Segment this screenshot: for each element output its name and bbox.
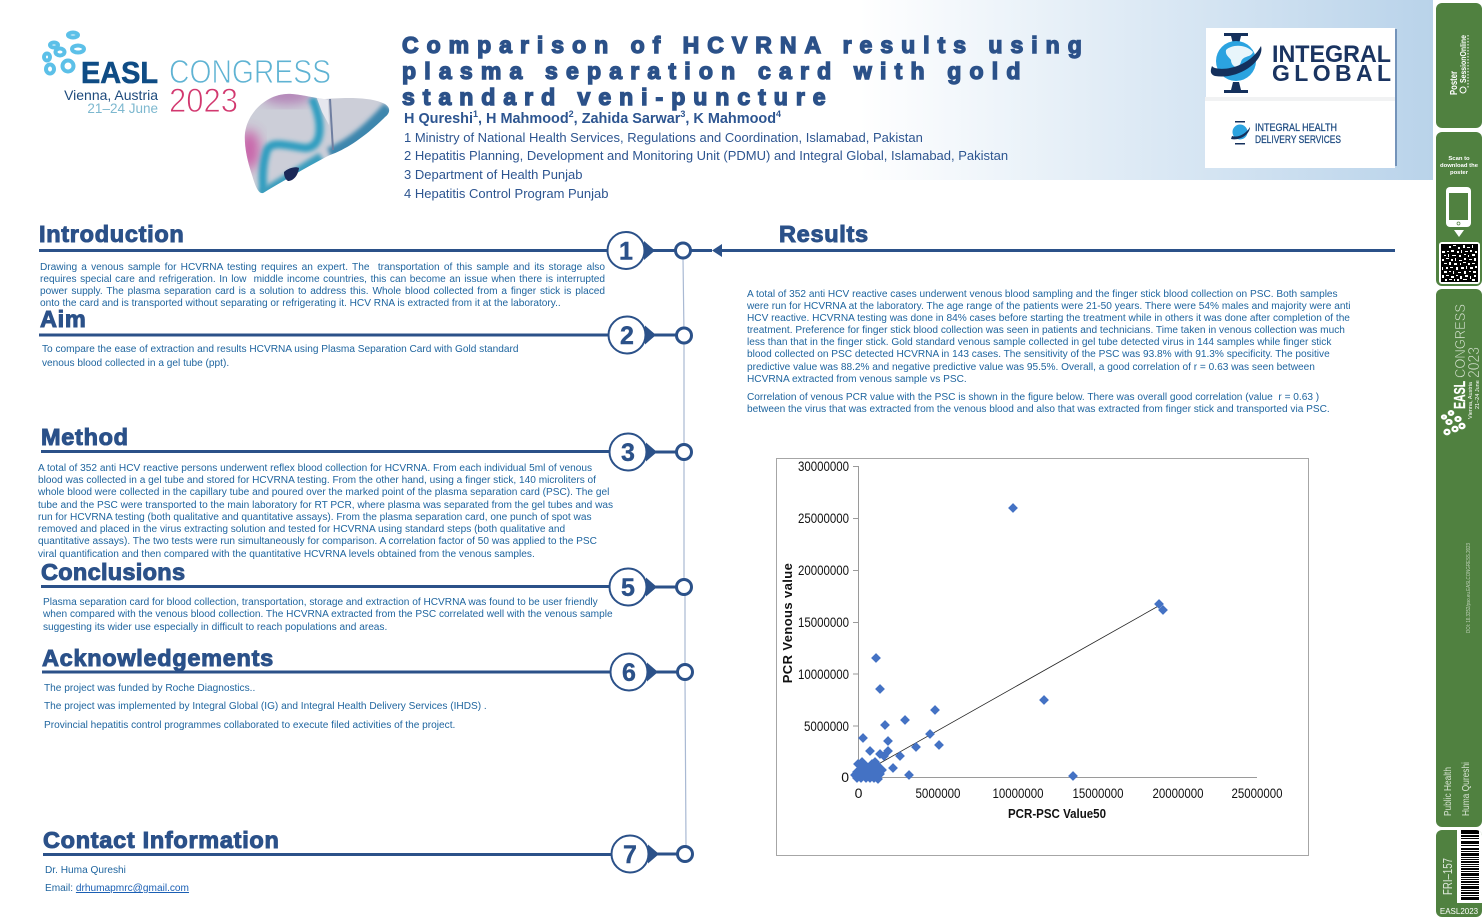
icon: poster session online mark: Poster <box>1449 71 1460 95</box>
logo panel: Integral Global and Integral Health Delivery Services: GLOBAL <box>1272 60 1391 86</box>
text: contact details: Email: drhumapmrc@gmail.com <box>45 883 189 894</box>
timeline connector: section rules, numbered circles and rings: 3 <box>621 439 635 467</box>
scatter chart: PCR venous value vs PCR-PSC value: 20000000 <box>798 562 849 578</box>
sidebar tab: poster ID and barcode <box>1436 830 1482 917</box>
text: results body: were run for HCVRNA at the laboratory. The age range of the patients were 21-50 years. There were 54% males and majority were anti <box>747 301 1351 312</box>
icon: liver illustration <box>244 94 390 194</box>
sidebar tab: poster session online <box>1436 3 1482 128</box>
text: conclusions body: when compared with the venous blood collection. The HCVRNA extracted from the PSC correlated well with the venous sample <box>43 609 613 620</box>
text: vertical congress branding: 2023 <box>1466 347 1483 378</box>
icon: poster session online mark: SessionOnline <box>1459 35 1468 83</box>
scatter chart: PCR venous value vs PCR-PSC value: 30000000 <box>798 458 849 474</box>
scatter chart: PCR venous value vs PCR-PSC value: 5000000 <box>916 785 961 801</box>
barcode <box>1457 830 1482 903</box>
text: scan to download the poster <box>1440 156 1478 176</box>
scatter chart: PCR venous value vs PCR-PSC value <box>776 458 1309 856</box>
scatter chart: PCR venous value vs PCR-PSC value: 20000000 <box>1152 785 1204 801</box>
logo panel: Integral Global and Integral Health Delivery Services: INTEGRAL <box>1272 41 1391 68</box>
logo: EASL Congress 2023: Vienna, Austria <box>64 87 158 103</box>
logo panel: Integral Global and Integral Health Delivery Services: DELIVERY SERVICES <box>1255 134 1341 146</box>
scatter chart: PCR venous value vs PCR-PSC value: 15000000 <box>1072 785 1124 801</box>
text: method body <box>38 463 613 560</box>
scatter chart: PCR venous value vs PCR-PSC value: 10000000 <box>798 666 849 682</box>
text: aim body: venous blood collected in a gel tube (ppt). <box>42 358 229 369</box>
text: poster number: FRI–157 <box>1440 858 1455 895</box>
text: vertical congress branding: Public Health <box>1442 767 1454 816</box>
text: contact details: Dr. Huma Qureshi <box>45 865 126 876</box>
text: acknowledgements body: The project was funded by Roche Diagnostics.. <box>44 683 255 694</box>
heading: Acknowledgements: Acknowledgements <box>42 645 274 671</box>
text: method body: removed and placed in the virus extracting solution and tested for HCVRNA using standard steps (both qualitative and <box>38 524 565 535</box>
text: vertical congress branding: CONGRESS <box>1452 304 1469 378</box>
logo: EASL Congress 2023: 21–24 June <box>87 101 158 116</box>
scatter chart: PCR venous value vs PCR-PSC value: 10000000 <box>992 785 1044 801</box>
sidebar tab: EASL Congress and DOI <box>1436 289 1482 827</box>
text: scan to download the poster: poster <box>1450 170 1468 176</box>
timeline connector: section rules, numbered circles and rings: 7 <box>623 841 637 869</box>
text: vertical congress branding: EASL <box>1452 381 1469 409</box>
text: method body: blood was collected in a gel tube and stored for HCVRNA testing. From the other hand, using a finger stick, 140 microliters of <box>38 475 596 486</box>
logo panel: Integral Global and Integral Health Delivery Services <box>1205 28 1396 168</box>
scatter chart: PCR venous value vs PCR-PSC value: PCR Venous value <box>780 563 795 683</box>
text: results body: less than that in the finger stick. Gold standard venous sample collected in gel tube detected virus in 144 samples while finger stick <box>747 337 1331 348</box>
text: vertical congress branding: DOI: 10.3252/pso.eu.EASLCONGRESS.2023 <box>1466 543 1472 633</box>
affiliations: 2 Hepatitis Planning, Development and Monitoring Unit (PDMU) and Integral Global, Islamabad, Pakistan <box>404 148 1008 163</box>
text: method body: run for HCVRNA testing (both qualitative and quantitative assays). From the plasma separation card, one punch of spot was <box>38 512 592 523</box>
heading: Aim: Aim <box>40 306 86 332</box>
text: acknowledgements body: The project was implemented by Integral Global (IG) and Integral Health Delivery Services (IHDS) . <box>44 701 487 712</box>
header gradient band <box>0 0 1433 180</box>
timeline connector: section rules, numbered circles and rings: 2 <box>620 322 634 350</box>
text: conclusions body: Plasma separation card for blood collection, transportation, storage and extraction of HCVRNA was found to be user friendly <box>43 597 598 608</box>
scatter chart: PCR venous value vs PCR-PSC value: 25000000 <box>798 510 849 526</box>
scatter chart: PCR venous value vs PCR-PSC value: 0 <box>841 769 849 785</box>
text: results body: predictive value was 88.2% and negative predictive value was 95.5%. Overall, a good correlation of r = 0.63 was seen between <box>747 362 1315 373</box>
title: standard veni-puncture <box>402 84 834 110</box>
text: results body: A total of 352 anti HCV reactive cases underwent venous blood sampling and the finger stick blood collection on PSC. Both samples <box>747 289 1338 300</box>
text: results body: treatment. Preference for finger stick blood collection was seen in patients and technicians. Time taken in venous collection was much <box>747 325 1345 336</box>
scatter chart: PCR venous value vs PCR-PSC value: 0 <box>855 785 863 801</box>
scatter chart: PCR venous value vs PCR-PSC value: 25000000 <box>1232 785 1283 801</box>
text: method body: quantitative assays). The two tests were run simultaneously for comparison. A correlation factor of 50 was applied to the PSC <box>38 536 597 547</box>
text: EASL2023 label: EASL2023 <box>1440 907 1478 916</box>
text: acknowledgements body <box>44 683 487 731</box>
timeline connector: section rules, numbered circles and rings: 5 <box>621 574 635 602</box>
icon: poster session online mark <box>1449 35 1468 95</box>
authors: H Qureshi1, H Mahmood2, Zahida Sarwar3, K Mahmood4 <box>404 109 781 127</box>
text: introduction body: power supply. The plasma separation card is a solution to address this. Whole blood collected from a finger stick is placed <box>40 286 605 297</box>
text: contact details <box>45 865 189 894</box>
affiliations: 1 Ministry of National Health Services, Regulations and Coordination, Islamabad, Pakistan <box>404 130 923 145</box>
text: results body <box>747 289 1351 415</box>
heading: Results: Results <box>779 221 869 247</box>
affiliations: 4 Hepatitis Control Program Punjab <box>404 186 608 201</box>
logo: EASL Congress 2023: CONGRESS <box>169 53 331 90</box>
title: Comparison of HCVRNA results using <box>402 32 1090 58</box>
logo: EASL Congress 2023 <box>42 30 331 120</box>
text: introduction body: requires special care and refrigeration. In low middle income countries, this can become an issue when there is interrupted <box>40 274 605 285</box>
QR code <box>1439 242 1480 284</box>
text: method body: A total of 352 anti HCV reactive persons underwent reflex blood collection for HCVRNA. From each individual 5ml of venous <box>38 463 592 474</box>
text: scan to download the poster: Scan to <box>1448 156 1470 162</box>
text: vertical congress branding: 21–24 June <box>1475 380 1481 409</box>
heading: Introduction: Introduction <box>39 221 184 247</box>
timeline connector: section rules, numbered circles and rings: 6 <box>622 659 636 687</box>
scatter chart: PCR venous value vs PCR-PSC value: PCR-PSC Value50 <box>1008 806 1106 821</box>
text: method body: tube and the PSC were transported to the main laboratory for RT PCR, where plasma was separated from the gel tubes and was <box>38 500 613 511</box>
affiliations <box>404 130 1008 201</box>
timeline connector: section rules, numbered circles and rings: 1 <box>619 238 633 266</box>
heading: Contact Information: Contact Information <box>43 827 280 853</box>
text: results body: HCV reactive. HCVRNA testing was done in 84% cases before starting the treatment while in others it was done after completion of the <box>747 313 1350 324</box>
scatter chart: PCR venous value vs PCR-PSC value: 5000000 <box>804 718 849 734</box>
affiliations: 3 Department of Health Punjab <box>404 167 582 182</box>
text: introduction body <box>40 262 605 309</box>
logo: EASL Congress 2023: EASL <box>81 55 158 90</box>
text: method body: viral quantification and then compared with the quantitative HCVRNA levels obtained from the venous samples. <box>38 549 535 560</box>
text: results body: Correlation of venous PCR value with the PSC is shown in the figure below. There was overall good correlation (value r = 0.63 ) <box>747 392 1319 403</box>
text: acknowledgements body: Provincial hepatitis control programmes collaborated to execute filed activities of the project. <box>44 720 455 731</box>
text: vertical congress branding: Huma Qureshi <box>1460 762 1472 816</box>
text: introduction body: onto the card and is transported without separating or refrigerating it. HCV RNA is extracted from it at the laboratory.. <box>40 298 561 309</box>
title: plasma separation card with gold <box>402 58 1029 84</box>
heading: Conclusions: Conclusions <box>41 559 185 585</box>
scatter chart: PCR venous value vs PCR-PSC value: 15000000 <box>798 614 849 630</box>
sidebar tab: scan to download <box>1436 132 1482 286</box>
heading: Method: Method <box>41 424 129 450</box>
icon: smartphone and arrow <box>1446 187 1471 237</box>
text: results body: between the virus that was extracted from the venous blood and also that was extracted from finger stick and transported via PSC. <box>747 404 1330 415</box>
text: vertical congress branding: Vienna, Austria <box>1468 381 1474 419</box>
title <box>402 32 1090 111</box>
text: vertical congress branding <box>1440 304 1483 816</box>
text: results body: HCVRNA extracted from venous sample vs PSC. <box>747 374 967 385</box>
text: aim body: To compare the ease of extraction and results HCVRNA using Plasma Separation Card with Gold standard <box>42 344 519 355</box>
text: aim body <box>42 344 519 369</box>
text: introduction body: Drawing a venous sample for HCVRNA testing requires an expert. The transportation of this sample and its storage also <box>40 262 605 273</box>
text: scan to download the poster: download the <box>1440 163 1478 169</box>
text: conclusions body: suggesting its wider use especially in difficult to reach populations and areas. <box>43 622 387 633</box>
text: results body: blood collected on PSC detected HCVRNA in 143 cases. The sensitivity of the PSC was 93.8% with 91.3% specificity. The positive <box>747 349 1330 360</box>
logo panel: Integral Global and Integral Health Delivery Services: INTEGRAL HEALTH <box>1255 122 1337 134</box>
text: conclusions body <box>43 597 613 633</box>
logo: EASL Congress 2023: 2023 <box>169 82 238 120</box>
text: method body: whole blood were collected in the capillary tube and poured over the marked point of the plasma separation card (PSC). The gel <box>38 487 609 498</box>
